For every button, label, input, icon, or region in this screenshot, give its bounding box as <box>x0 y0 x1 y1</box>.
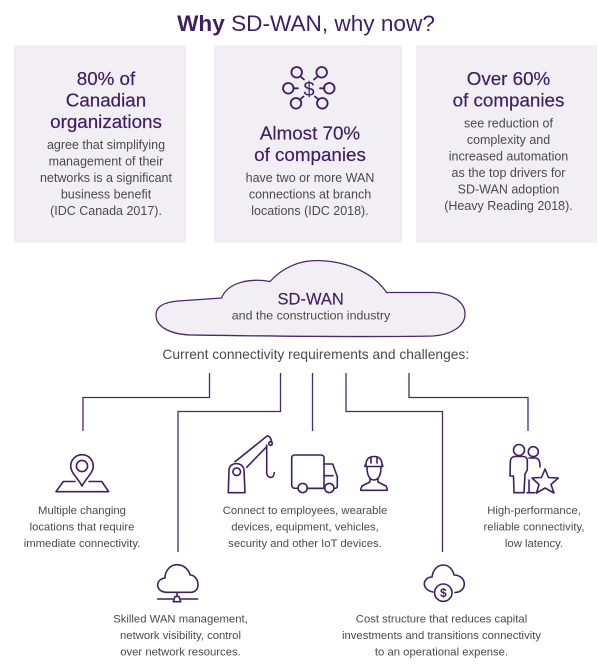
text: cost structure: Cost structure that reduces capital <box>356 614 527 626</box>
heading: 80%: organizations <box>50 111 162 132</box>
item: high performance <box>484 444 584 550</box>
body text: panel 3: see reduction of <box>464 116 553 130</box>
icon: dollar cloud <box>424 565 464 601</box>
item: connect devices <box>223 436 387 550</box>
panel: over 60% of companies <box>416 45 597 243</box>
icon: map pin <box>56 455 109 492</box>
text: devices: security and other IoT devices. <box>228 538 382 550</box>
panel: 80% of Canadian organizations <box>14 45 186 243</box>
heading: over 60%: Over 60% <box>467 68 551 89</box>
icon: network cloud <box>158 565 198 602</box>
text: cost structure: investments and transitions connectivity <box>342 630 541 642</box>
icon: people with star <box>510 444 558 493</box>
body text: panel 2: locations (IDC 2018). <box>251 204 369 218</box>
body text: panel 3: (Heavy Reading 2018). <box>444 199 573 213</box>
icon: worker with hard hat <box>361 456 387 490</box>
text: cost structure: to an operational expense. <box>375 647 508 659</box>
icon: dollar network <box>283 67 335 109</box>
cloud heading: SD-WAN <box>278 290 344 308</box>
heading: over 60%: of companies <box>453 90 564 110</box>
text: WAN management: over network resources. <box>120 647 241 659</box>
panel: almost 70% of companies <box>214 45 402 243</box>
title: Why SD-WAN, why now? <box>177 11 435 36</box>
item: multiple changing locations <box>24 455 140 550</box>
text: devices: devices, equipment, vehicles, <box>231 522 379 534</box>
body text: panel 1: agree that simplifying <box>47 138 165 152</box>
icon: crane <box>228 436 274 493</box>
text: WAN management: network visibility, control <box>120 630 241 642</box>
body text: panel 1: (IDC Canada 2017). <box>50 204 162 218</box>
text: locations: Multiple changing <box>38 505 126 517</box>
heading: almost 70%: Almost 70% <box>260 122 360 144</box>
icon: dollar sign: $ <box>303 79 315 101</box>
text: performance: low latency. <box>505 538 563 550</box>
heading: almost 70%: of companies <box>254 144 366 165</box>
icon: truck <box>292 455 337 493</box>
text: locations: immediate connectivity. <box>24 538 140 550</box>
cloud: SD-WAN and the construction industry <box>156 260 465 337</box>
heading: 80%: Canadian <box>66 90 146 110</box>
body text: panel 2: have two or more WAN <box>246 171 374 185</box>
item: cost structure <box>342 565 541 659</box>
heading: 80%: 80% of <box>77 68 136 89</box>
body text: panel 1: networks is a significant <box>40 171 173 185</box>
body text: panel 2: connections at branch <box>249 188 371 202</box>
body text: panel 3: increased automation <box>449 150 568 164</box>
text: devices: Connect to employees, wearable <box>223 505 387 517</box>
cloud subheading: and the construction industry <box>232 308 391 322</box>
subheading: requirements and challenges: Current connectivity requirements and challenges: <box>162 347 469 362</box>
item: skilled WAN management <box>113 565 248 659</box>
icon: dollar glyph: $ <box>440 586 447 600</box>
text: WAN management: Skilled WAN management, <box>113 614 248 626</box>
body text: panel 1: business benefit <box>61 188 152 202</box>
body text: panel 3: as the top drivers for <box>452 166 565 180</box>
connector lines <box>83 373 528 552</box>
body text: panel 3: SD-WAN adoption <box>458 182 559 196</box>
body text: panel 3: complexity and <box>467 133 550 147</box>
text: performance: reliable connectivity, <box>484 522 584 534</box>
body text: panel 1: management of their <box>49 154 163 168</box>
text: performance: High-performance, <box>487 505 581 517</box>
text: locations: locations that require <box>30 522 134 534</box>
